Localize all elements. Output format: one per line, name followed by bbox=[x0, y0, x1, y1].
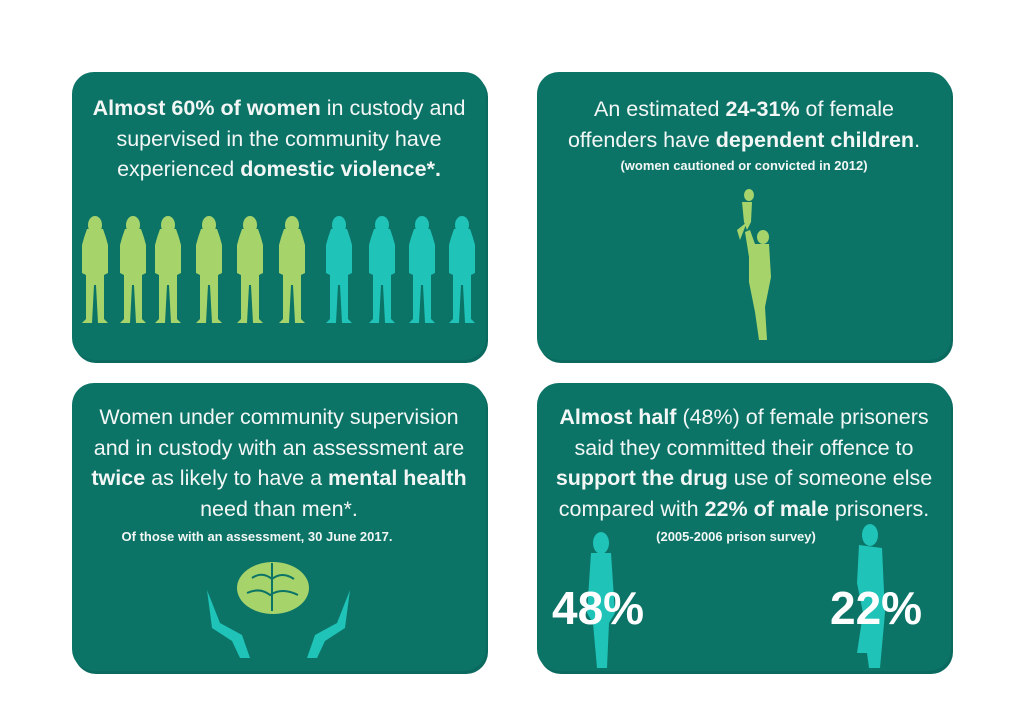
text: mental health statistic: twice as likely to have a mental health bbox=[91, 466, 467, 490]
panel: drug use bbox=[537, 383, 951, 671]
panel: mental health bbox=[72, 383, 486, 671]
text: dependent children statistic: An estimated 24-31% of female bbox=[594, 97, 894, 121]
text: drug use statistic: support the drug use of someone else bbox=[556, 466, 932, 490]
text: mental health statistic bbox=[91, 405, 467, 520]
icon: mother lifting child bbox=[737, 189, 771, 340]
stat: 48%: 48% bbox=[552, 582, 644, 634]
text: source note: Of those with an assessment, 30 June 2017. bbox=[122, 529, 392, 544]
text: source note: (2005-2006 prison survey) bbox=[656, 529, 816, 544]
icon: row of 10 women silhouettes bbox=[82, 216, 475, 323]
panel: domestic violence bbox=[72, 72, 486, 360]
text: domestic violence statistic: Almost 60% of women in custody and bbox=[93, 96, 465, 120]
text: mental health statistic: Women under community supervision bbox=[99, 405, 459, 429]
text: drug use statistic: compared with 22% of male prisoners. bbox=[559, 496, 929, 520]
text: mental health statistic: and in custody with an assessment are bbox=[94, 436, 464, 460]
text: domestic violence statistic: experienced domestic violence*. bbox=[117, 157, 441, 181]
text: domestic violence statistic bbox=[93, 96, 465, 181]
panel: dependent children bbox=[537, 72, 951, 360]
text: drug use statistic: Almost half (48%) of female prisoners bbox=[559, 405, 929, 429]
stat: 22%: 22% bbox=[830, 582, 922, 634]
text: dependent children statistic bbox=[568, 97, 920, 152]
text: source note: (women cautioned or convicted in 2012) bbox=[620, 158, 868, 173]
text: domestic violence statistic: supervised in the community have bbox=[116, 126, 442, 150]
text: drug use statistic: said they committed their offence to bbox=[574, 436, 914, 460]
text: mental health statistic: need than men*. bbox=[200, 496, 358, 520]
text: drug use statistic bbox=[556, 405, 932, 520]
icon: brain in hands bbox=[207, 562, 350, 658]
icon: woman and man silhouettes bbox=[587, 524, 885, 668]
text: dependent children statistic: offenders have dependent children. bbox=[568, 128, 920, 152]
